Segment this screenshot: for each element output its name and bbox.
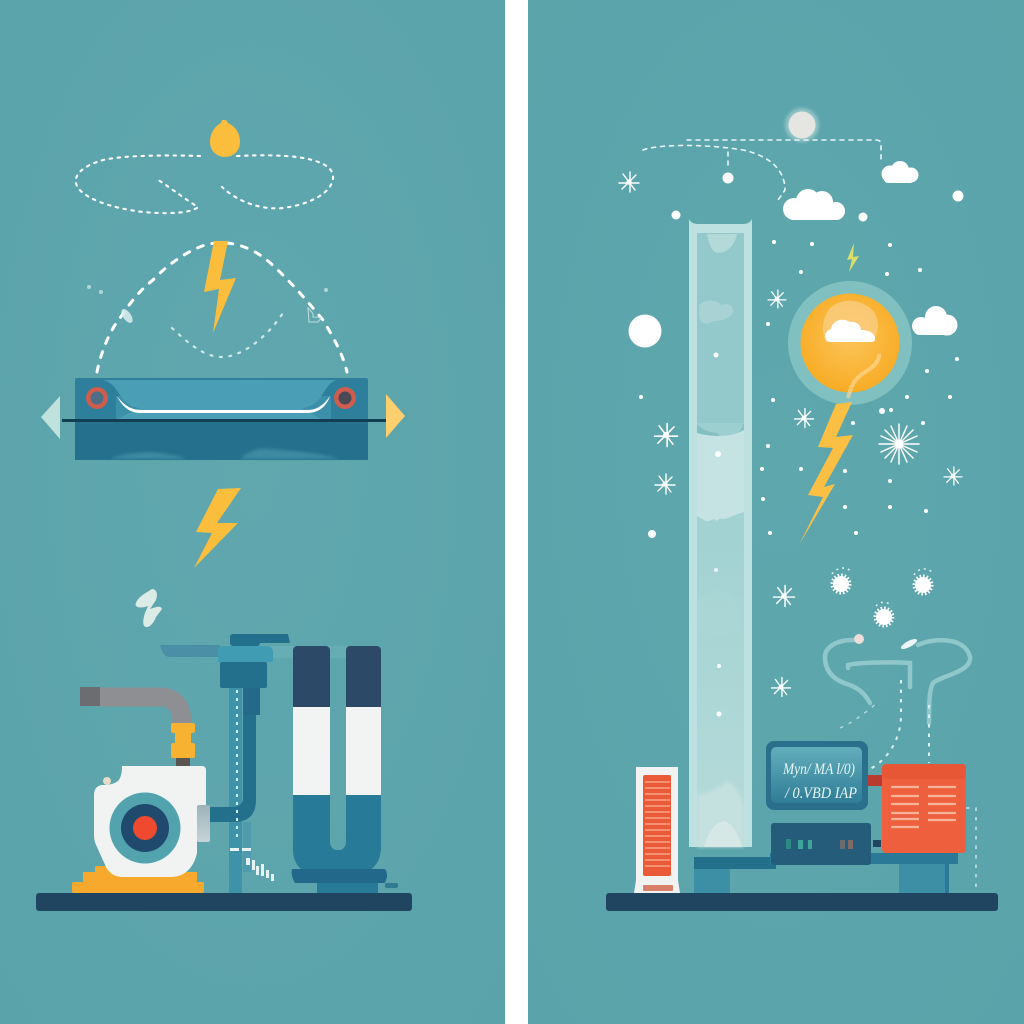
compressor: feed pipe	[160, 645, 220, 657]
icon: left arrow head	[41, 396, 60, 439]
icon: yellow bulb	[210, 120, 240, 157]
compressor: yellow coupling	[171, 723, 195, 766]
icon: left bolt	[86, 387, 108, 409]
icon: big cloud	[783, 189, 845, 220]
icon: main lightning bolt	[799, 402, 853, 545]
twin cylinders	[292, 646, 398, 893]
panel: left background	[0, 0, 505, 1024]
compressor: grey exhaust pipe	[80, 687, 182, 723]
dashed orbit path	[76, 155, 333, 213]
dashed arc	[97, 243, 347, 372]
loop condenser tubing	[825, 640, 970, 723]
compressor: orange base	[72, 866, 204, 893]
monitor with handwriting	[766, 741, 868, 810]
snowflakes	[619, 172, 962, 696]
icon: upper lightning bolt	[204, 241, 236, 333]
small dots field	[639, 172, 964, 538]
icon: cloud right of sun	[912, 306, 958, 336]
axis line	[62, 419, 386, 422]
icon: sun orb with cloud	[788, 281, 912, 405]
icon: white ball	[628, 314, 662, 348]
icon: lower lightning bolt	[194, 488, 241, 568]
control box with lights	[771, 823, 881, 865]
icon: right bolt	[334, 387, 356, 409]
red stack heater	[634, 767, 680, 893]
icon: pale moon	[785, 108, 819, 142]
monitor with handwriting: Myn/ MA l/0)	[782, 761, 855, 778]
compressor: faint cross pipe	[270, 646, 346, 658]
dashed routes	[643, 140, 881, 200]
red generator	[882, 764, 966, 853]
compressor: white body with red eye	[94, 766, 210, 877]
icon: cloud top right	[882, 161, 918, 183]
device: blue bar	[75, 378, 368, 460]
compressor: vertical riser	[210, 688, 260, 893]
ground plate left	[36, 893, 412, 911]
icon: glass tube	[689, 219, 752, 847]
ground plate right	[606, 893, 998, 911]
sparkles near arc	[87, 285, 328, 325]
icon: small faded smoke	[136, 589, 162, 627]
workbench table	[694, 853, 958, 893]
dotted inner arc	[172, 313, 283, 357]
scattered particles	[230, 848, 274, 881]
dashed feed lines	[840, 680, 976, 893]
panel: left diagram	[36, 120, 412, 911]
panel: right diagram	[606, 108, 998, 911]
red connector	[868, 775, 882, 786]
compressor: valve head	[218, 634, 290, 688]
icon: right arrow head	[386, 394, 405, 438]
tubing sparks	[854, 634, 918, 651]
panel: right background	[528, 0, 1024, 1024]
fuzzy snow balls	[832, 568, 934, 626]
monitor with handwriting: / 0.VBD IAP	[784, 785, 857, 802]
icon: small lightning	[847, 243, 859, 272]
